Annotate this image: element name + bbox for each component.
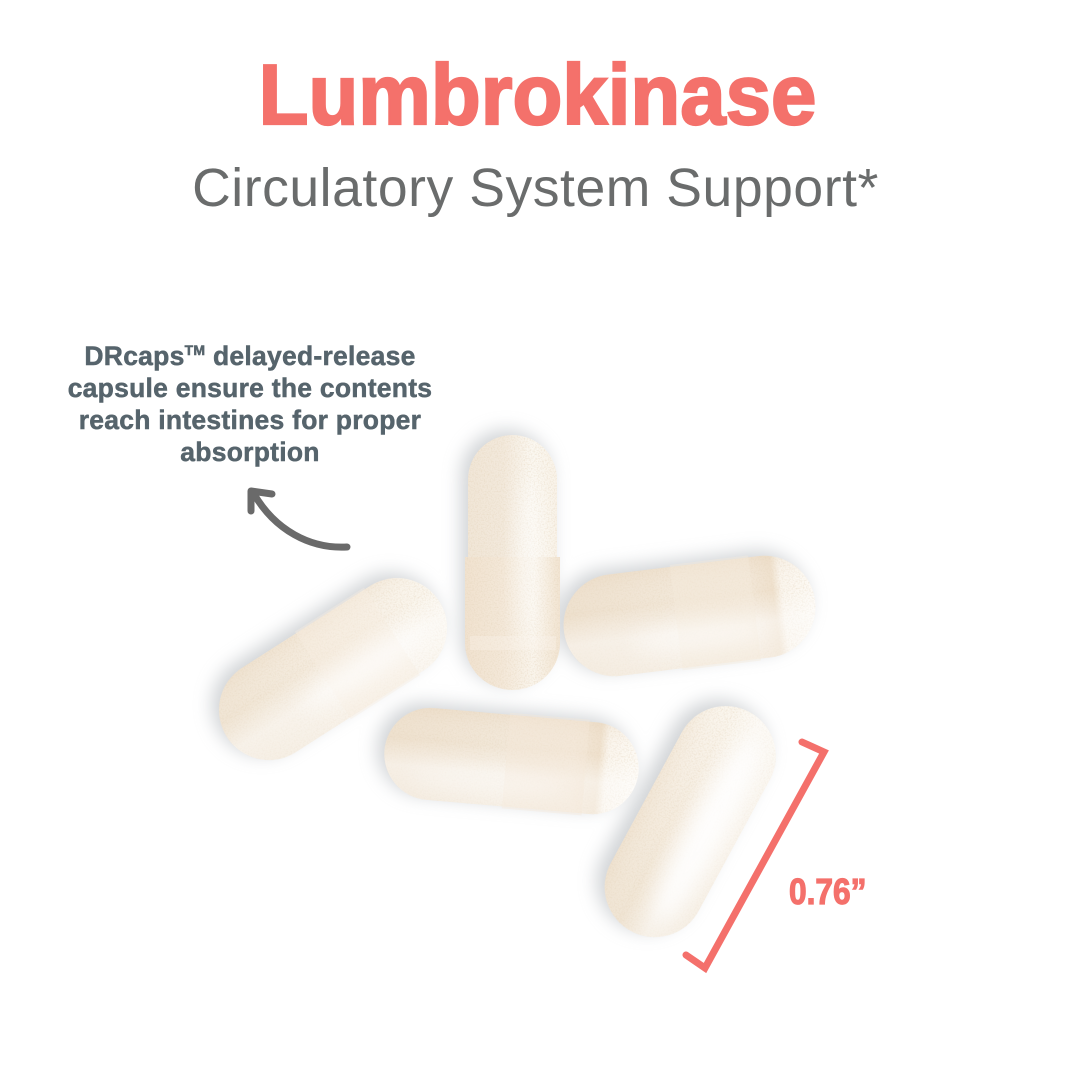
capsule: top centre: [465, 435, 560, 690]
size label: 0.76”: [789, 871, 867, 912]
arrow: [251, 491, 347, 547]
callout text: capsule ensure the contents: [68, 373, 432, 403]
callout text: DRcapsTM delayed-release: [84, 341, 416, 371]
size bracket: [686, 742, 824, 968]
capsule shadows: [193, 430, 814, 949]
capsule: bottom right: [587, 688, 794, 955]
capsule: bottom centre: [380, 702, 643, 820]
capsule: left: [199, 557, 467, 781]
callout text: reach intestines for proper: [79, 405, 421, 435]
callout text: [68, 341, 432, 467]
title: Lumbrokinase: [259, 48, 816, 143]
capsule: right: [557, 548, 822, 684]
callout text: absorption: [180, 437, 320, 467]
subtitle: Circulatory System Support*: [192, 159, 879, 218]
